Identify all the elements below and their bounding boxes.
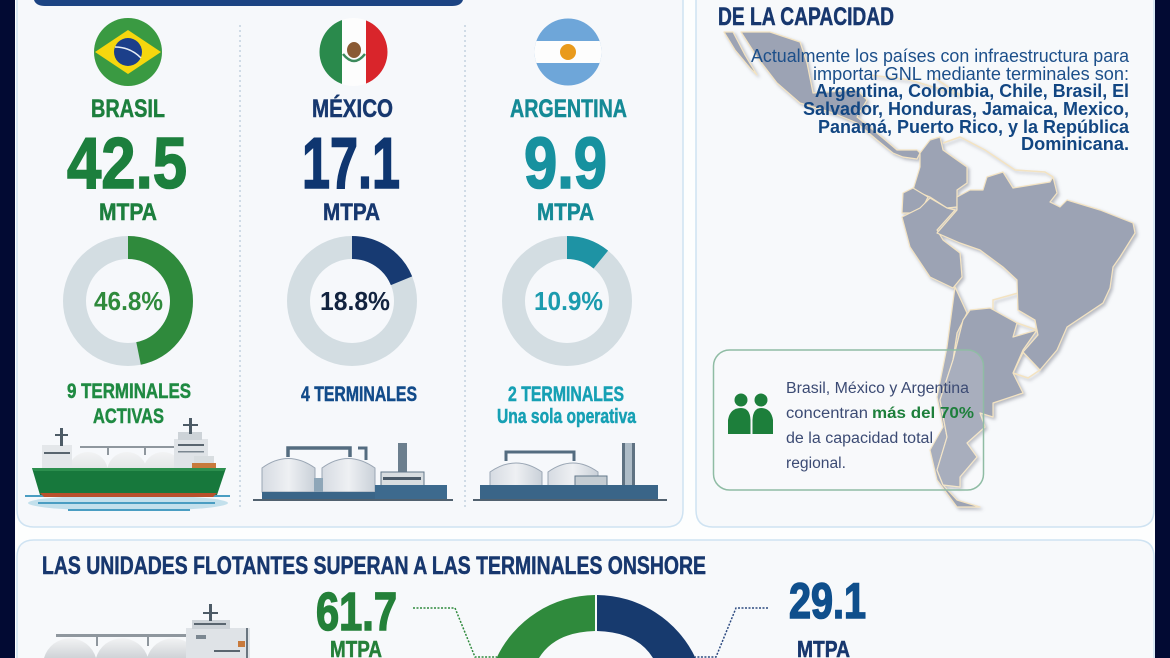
callout text xyxy=(786,380,974,472)
Ecuador xyxy=(902,188,928,213)
donut: Argentina 10.9% xyxy=(514,248,620,354)
donut: Brasil 46.8%: 46.8% xyxy=(94,286,163,316)
callout text: de la capacidad total xyxy=(786,430,933,447)
donut: Argentina 10.9%: 10.9% xyxy=(534,286,603,316)
text: importing countries xyxy=(751,46,1130,154)
callout: 70% of capacity xyxy=(714,350,984,490)
heading: Argentina: ARGENTINA xyxy=(510,95,627,123)
leader line: onshore xyxy=(695,608,768,657)
Brazil xyxy=(937,172,1135,370)
top banner xyxy=(34,0,463,6)
text: importing countries: Salvador, Honduras, Jamaica, Mexico, xyxy=(803,99,1129,119)
icon: Brazil flag xyxy=(94,18,162,86)
panel: leading countries xyxy=(17,0,683,527)
Colombia xyxy=(913,137,967,208)
unit: México: MTPA xyxy=(323,199,380,226)
text: importing countries: Argentina, Colombia, Chile, Brasil, El xyxy=(815,81,1129,101)
icon: LNG carrier ship xyxy=(25,418,230,511)
label: Argentina terminals xyxy=(497,383,637,428)
donut: México 18.8%: 18.8% xyxy=(320,286,390,316)
label: Brasil terminals: ACTIVAS xyxy=(93,405,164,428)
label: Argentina terminals: Una sola operativa xyxy=(497,406,637,428)
unit: Brasil: MTPA xyxy=(99,199,157,226)
callout text: Brasil, México y Argentina xyxy=(786,380,969,397)
value: onshore capacity: 29.1 xyxy=(789,573,866,629)
callout text: regional. xyxy=(786,455,846,472)
value: floating capacity: 61.7 xyxy=(316,582,397,642)
icon: México LNG terminal xyxy=(253,443,453,501)
heading: floating units: LAS UNIDADES FLOTANTES SUPERAN A LAS TERMINALES ONSHORE xyxy=(42,552,706,580)
leader line: floating xyxy=(413,608,497,657)
Mexico and Central America xyxy=(741,32,920,159)
icon: floating LNG ship xyxy=(44,604,250,658)
icon: two people xyxy=(728,394,773,434)
callout text: concentran xyxy=(786,405,868,422)
label: México terminals: 4 TERMINALES xyxy=(301,383,417,406)
heading: México: MÉXICO xyxy=(312,94,393,123)
text: importing countries: Panamá, Puerto Rico, y la República xyxy=(818,117,1130,137)
Venezuela, Guyanas, Paraguay, Uruguay outlines xyxy=(943,137,1053,177)
panel: map and capacity xyxy=(696,0,1154,527)
text: importing countries: Dominicana. xyxy=(1021,134,1129,154)
map: Latin America xyxy=(724,32,1135,507)
heading: de la capacidad: DE LA CAPACIDAD xyxy=(718,3,894,31)
value: México capacity: 17.1 xyxy=(302,124,400,204)
icon: Argentina LNG terminal xyxy=(473,443,667,501)
unit: Argentina: MTPA xyxy=(537,199,594,226)
icon: Argentina flag xyxy=(534,18,602,86)
panel: floating units vs onshore xyxy=(17,540,1154,658)
Chile xyxy=(930,287,980,507)
heading: Brasil: BRASIL xyxy=(91,95,165,123)
Peru xyxy=(902,198,962,288)
label: Brasil terminals xyxy=(67,380,191,428)
Argentina xyxy=(937,308,1037,487)
value: Argentina capacity: 9.9 xyxy=(524,124,607,204)
label: Argentina terminals: 2 TERMINALES xyxy=(508,383,624,406)
label: Brasil terminals: 9 TERMINALES xyxy=(67,380,191,403)
text: importing countries: importar GNL mediante terminales son: xyxy=(813,64,1129,84)
donut: Brasil 46.8% xyxy=(74,248,182,354)
value: Brasil capacity: 42.5 xyxy=(67,124,187,204)
text: importing countries: Actualmente los países con infraestructura para xyxy=(751,46,1130,66)
donut: México 18.8% xyxy=(298,248,406,354)
donut: floating vs onshore xyxy=(496,595,696,658)
callout text: más del 70% xyxy=(872,405,974,422)
icon: Mexico flag xyxy=(319,18,389,86)
